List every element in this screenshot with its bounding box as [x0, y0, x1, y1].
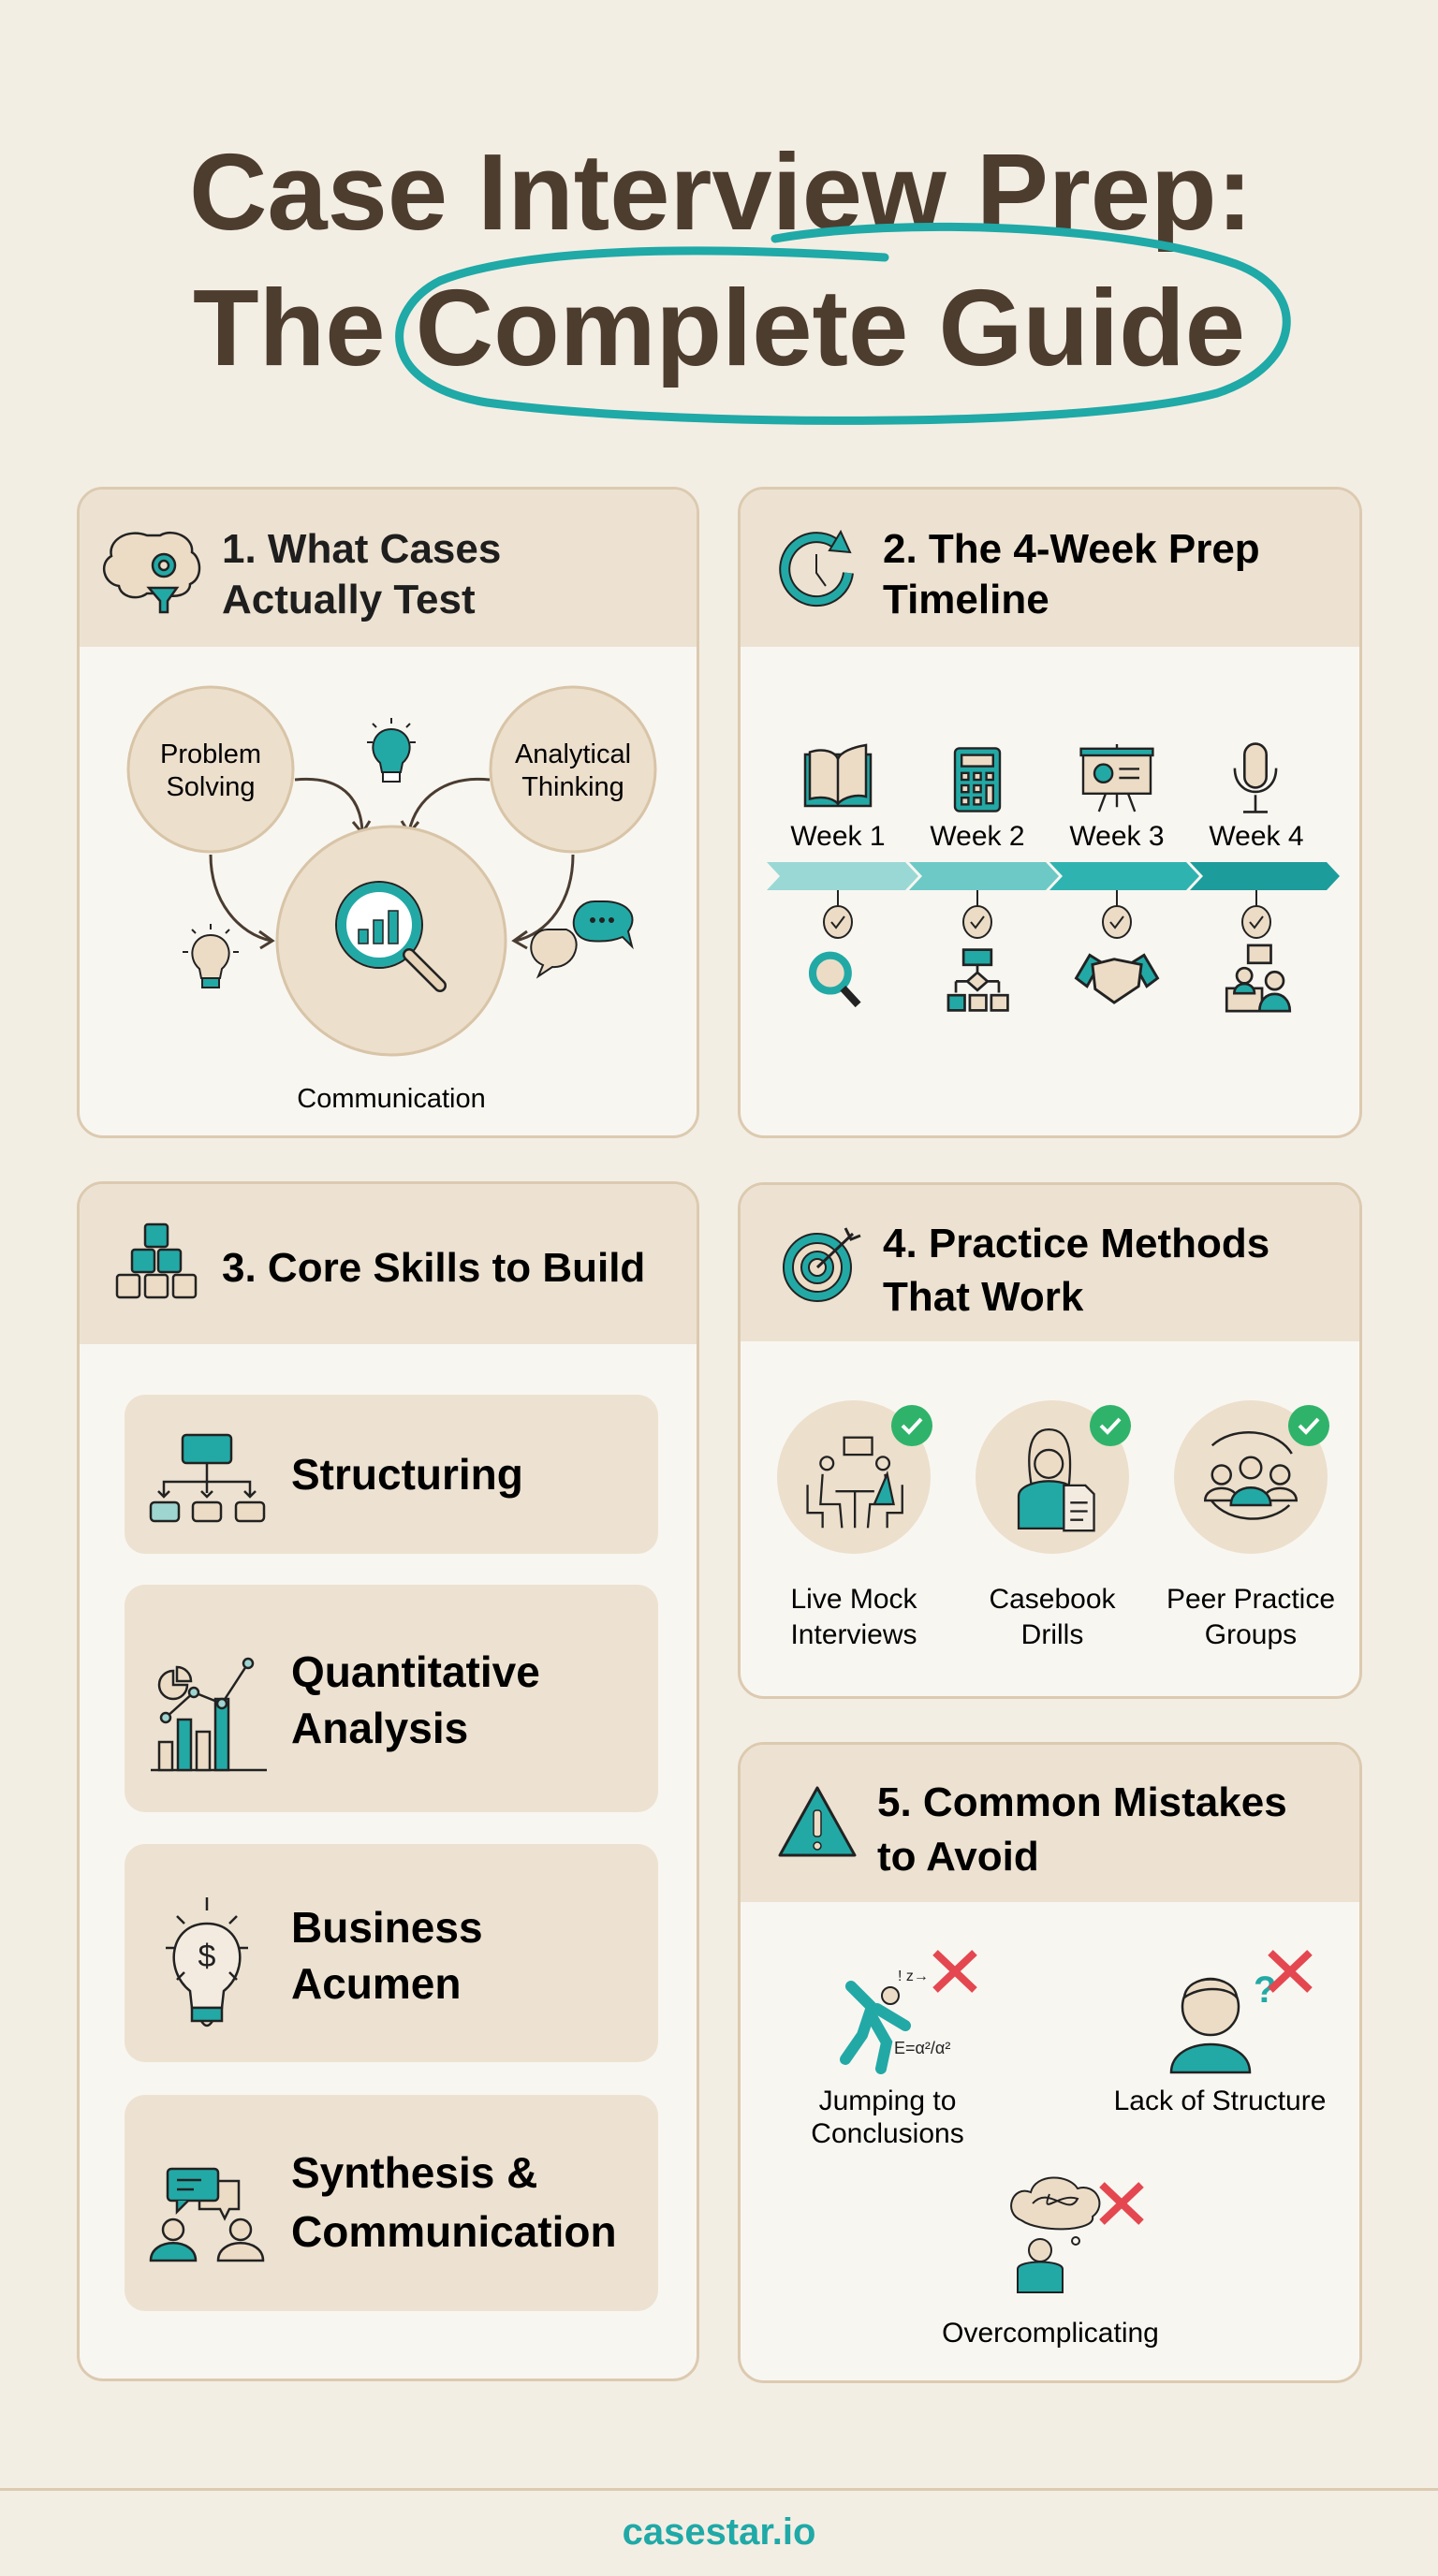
method: peer practice groups: Peer Practice: [1167, 1584, 1335, 1615]
week labels: Week 3: [1069, 821, 1165, 852]
week labels: [790, 821, 1304, 852]
card: structuring: Structuring: [291, 1450, 523, 1499]
card: synthesis & communication: Synthesis &: [291, 2148, 537, 2197]
milestone icons: [813, 945, 1290, 1011]
title: [189, 131, 1291, 425]
mistake: jumping to conclusions: ! z→: [898, 1969, 929, 1984]
week labels: Week 4: [1209, 821, 1304, 852]
header text: 2. The 4-Week Prep: [883, 526, 1260, 572]
circle: communication center: [277, 827, 506, 1055]
method: casebook drills: Casebook: [989, 1584, 1117, 1615]
week icons: [805, 744, 1276, 812]
footer: brand: casestar.io: [623, 2511, 815, 2553]
icon: clock arrow: [785, 532, 850, 601]
panel 3: core skills: [77, 1181, 699, 2381]
method: casebook drills: [976, 1400, 1131, 1650]
card: business acumen: $: [198, 1939, 216, 1974]
footer divider: [0, 2488, 1438, 2491]
card: quantitative analysis: Analysis: [291, 1704, 468, 1752]
circle: problem solving: Problem: [160, 739, 261, 769]
circle: problem solving: [128, 687, 293, 852]
card: business acumen: Acumen: [291, 1959, 461, 2008]
card: business acumen: [125, 1844, 658, 2062]
header text: 1. What Cases: [222, 526, 501, 572]
label: communication: Communication: [297, 1084, 486, 1114]
week labels: Week 2: [930, 821, 1025, 852]
panel 1: what cases actually test: Actually Test: [222, 577, 476, 622]
card: synthesis & communication: Communication: [291, 2207, 617, 2256]
icon: brain gear: [104, 533, 199, 612]
icon: blocks: [117, 1224, 196, 1297]
card: quantitative analysis: Quantitative: [291, 1647, 540, 1696]
icon: chat bubbles: [531, 901, 633, 976]
method: live mock interviews: Interviews: [790, 1619, 917, 1650]
mistake: lack of structure: Lack of Structure: [1114, 2086, 1326, 2116]
icon: warning triangle: [780, 1788, 855, 1855]
mistake: overcomplicating: [942, 2177, 1159, 2349]
mistake: jumping to conclusions: Jumping to: [819, 2086, 956, 2116]
circle: analytical thinking: Analytical: [515, 739, 631, 769]
checkpoints: [824, 890, 1270, 938]
week labels: Week 1: [790, 821, 886, 852]
card: structuring: [125, 1395, 658, 1554]
panel 5: common mistakes: [738, 1742, 1362, 2383]
method: live mock interviews: Live Mock: [790, 1584, 918, 1615]
method: live mock interviews: [777, 1400, 932, 1650]
title line 2: The Complete Guide: [193, 267, 1245, 388]
header text: 4. Practice Methods: [883, 1221, 1269, 1266]
mistake: jumping to conclusions: E=α²/α²: [894, 2039, 950, 2057]
panel 4: practice methods: [738, 1182, 1362, 1699]
panel 2: 4-week timeline: Timeline: [883, 577, 1049, 622]
method: peer practice groups: [1167, 1400, 1335, 1650]
panel 1: what cases actually test: [77, 487, 699, 1138]
circle: analytical thinking: [491, 687, 655, 852]
icon: bulb top: [367, 718, 416, 782]
panel 4: practice methods: That Work: [883, 1274, 1084, 1320]
icon: bulb left: [183, 924, 239, 988]
card: quantitative analysis: [125, 1585, 658, 1812]
circle: analytical thinking: Thinking: [521, 772, 624, 802]
icon: target: [784, 1228, 860, 1301]
header text: 5. Common Mistakes: [877, 1779, 1287, 1825]
header text: 3. Core Skills to Build: [222, 1245, 645, 1291]
panel 5: common mistakes: to Avoid: [877, 1834, 1039, 1880]
mistake: jumping to conclusions: Conclusions: [811, 2118, 964, 2149]
mistake: jumping to conclusions: [811, 1953, 975, 2149]
method: casebook drills: Drills: [1021, 1619, 1083, 1650]
arrows: [211, 779, 573, 948]
circle: problem solving: Solving: [166, 772, 256, 802]
mistake: overcomplicating: Overcomplicating: [942, 2318, 1159, 2349]
card: business acumen: Business: [291, 1903, 483, 1952]
panel 2: 4-week timeline: [738, 487, 1362, 1138]
method: peer practice groups: Groups: [1205, 1619, 1297, 1650]
mistake: lack of structure: ?: [1254, 1969, 1276, 2011]
timeline chevrons: [767, 862, 1340, 890]
card: synthesis & communication: [125, 2095, 658, 2311]
mistake: lack of structure: [1114, 1953, 1326, 2116]
title line 1: Case Interview Prep:: [189, 131, 1253, 253]
highlight ellipse: [400, 227, 1286, 420]
